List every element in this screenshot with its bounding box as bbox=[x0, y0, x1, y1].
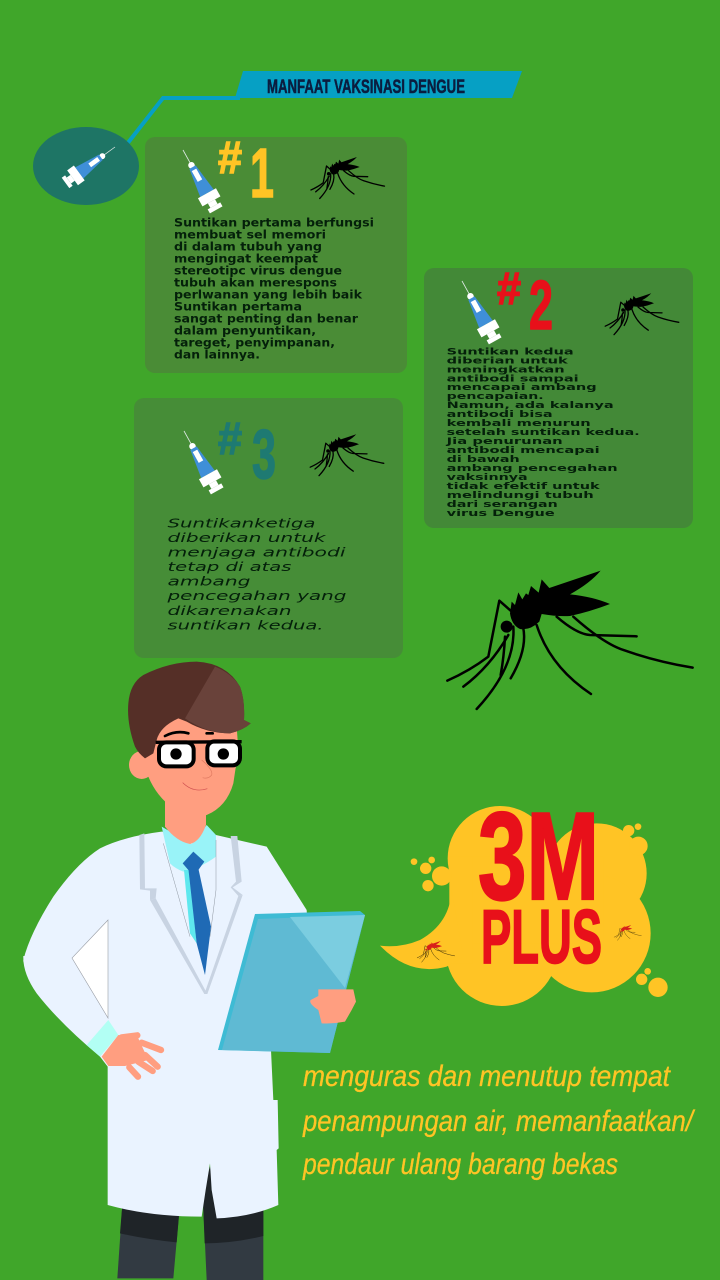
bubble shape bbox=[380, 806, 668, 1006]
text: first dose: membuat sel memori bbox=[174, 228, 326, 242]
text: second dose: kembali menurun bbox=[447, 419, 591, 429]
number 2: # bbox=[497, 263, 521, 314]
text: second dose: virus Dengue bbox=[447, 509, 555, 519]
text: second dose: diberian untuk bbox=[447, 356, 568, 366]
text: third dose: menjaga antibodi bbox=[168, 546, 347, 560]
panel: suntikan pertama bbox=[145, 132, 407, 373]
text: first dose: dalam penyuntikan, bbox=[174, 324, 316, 338]
text: first dose: sangat penting dan benar bbox=[174, 312, 358, 326]
text: third dose: tetap di atas bbox=[168, 560, 292, 574]
text: second dose: dari serangan bbox=[447, 500, 558, 510]
text: third dose: suntikan kedua. bbox=[168, 618, 324, 632]
text: second dose: Suntikan kedua bbox=[447, 347, 574, 357]
text: second dose: setelah suntikan kedua. bbox=[447, 428, 640, 438]
icon: large mosquito bbox=[447, 571, 693, 709]
text: second dose: meningkatkan bbox=[447, 365, 565, 375]
icon: mosquito bbox=[605, 293, 679, 335]
speech bubble: 3M Plus bbox=[380, 788, 668, 1006]
icon: syringe badge bbox=[33, 127, 139, 205]
number 2: 2 bbox=[529, 266, 553, 344]
text: second dose: pencapaian. bbox=[447, 392, 544, 402]
doctor hand on clipboard bbox=[310, 989, 356, 1023]
text: 3M plus description: menguras dan menutup tempat bbox=[303, 1060, 671, 1093]
text: second dose: antibodi bisa bbox=[447, 410, 553, 420]
panel: suntikan ketiga bbox=[134, 398, 403, 658]
icon: red mosquito left bbox=[417, 941, 455, 962]
text: second dose: antibodi mencapai bbox=[447, 446, 600, 456]
number 2 bbox=[497, 263, 553, 344]
number 1: # bbox=[218, 132, 242, 183]
heading: 3M: 3M bbox=[478, 788, 599, 926]
text: first dose: dan lainnya. bbox=[174, 348, 260, 362]
icon: red mosquito right bbox=[614, 925, 641, 940]
text: first dose: stereotipc virus dengue bbox=[174, 264, 342, 278]
number 1 bbox=[218, 132, 274, 212]
illustration: doctor bbox=[23, 662, 365, 1280]
text: first dose: tareget, penyimpanan, bbox=[174, 336, 335, 350]
doctor coat bbox=[23, 956, 310, 1218]
text: first dose: Suntikan pertama bbox=[174, 300, 302, 314]
icon: syringe bbox=[174, 145, 225, 215]
text: second dose: Jia penurunan bbox=[445, 437, 563, 447]
text: third dose: pencegahan yang bbox=[166, 589, 347, 603]
text: first dose: Suntikan pertama berfungsi bbox=[174, 216, 374, 230]
text: second dose: antibodi sampai bbox=[447, 374, 579, 384]
text: second dose: tidak efektif untuk bbox=[447, 482, 600, 492]
panel: suntikan kedua bbox=[424, 263, 693, 528]
text: second dose: di bawah bbox=[447, 455, 520, 465]
text: first dose: tubuh akan merespons bbox=[174, 276, 337, 290]
doctor sleeve fold bbox=[72, 920, 108, 1018]
text: second dose: Namun, ada kalanya bbox=[447, 401, 614, 411]
text: 3M plus description: pendaur ulang barang bekas bbox=[302, 1148, 618, 1181]
number 3 bbox=[218, 413, 276, 493]
text: third dose: ambang bbox=[168, 575, 251, 589]
number 3: 3 bbox=[252, 415, 276, 493]
text: third dose: Suntikanketiga bbox=[168, 517, 316, 531]
text: first dose: di dalam tubuh yang bbox=[174, 240, 322, 254]
text: second dose bbox=[445, 347, 640, 519]
doctor torso and head bbox=[23, 662, 310, 994]
text: second dose: mencapai ambang bbox=[447, 383, 597, 393]
icon: mosquito bbox=[310, 434, 384, 476]
number 3: # bbox=[218, 413, 242, 464]
doctor clipboard bbox=[218, 911, 365, 1053]
text: first dose bbox=[174, 216, 374, 362]
text: third dose: dikarenakan bbox=[168, 604, 292, 618]
text: third dose: diberikan untuk bbox=[168, 531, 327, 545]
text: second dose: melindungi tubuh bbox=[447, 491, 594, 501]
text: 3M plus description bbox=[302, 1060, 695, 1181]
text: third dose bbox=[166, 517, 347, 632]
text: first dose: mengingat keempat bbox=[174, 252, 319, 266]
text: second dose: vaksinnya bbox=[447, 473, 528, 483]
text: second dose: ambang pencegahan bbox=[447, 464, 618, 474]
doctor legs bbox=[117, 1167, 263, 1280]
title: MANFAAT VAKSINASI DENGUE bbox=[267, 77, 465, 98]
title banner bbox=[127, 71, 522, 144]
icon: mosquito bbox=[311, 157, 384, 198]
heading: PLUS: PLUS bbox=[481, 895, 602, 980]
icon: syringe bbox=[175, 426, 226, 496]
number 1: 1 bbox=[250, 134, 274, 212]
text: first dose: perlwanan yang lebih baik bbox=[174, 288, 362, 302]
icon: syringe bbox=[453, 276, 504, 346]
